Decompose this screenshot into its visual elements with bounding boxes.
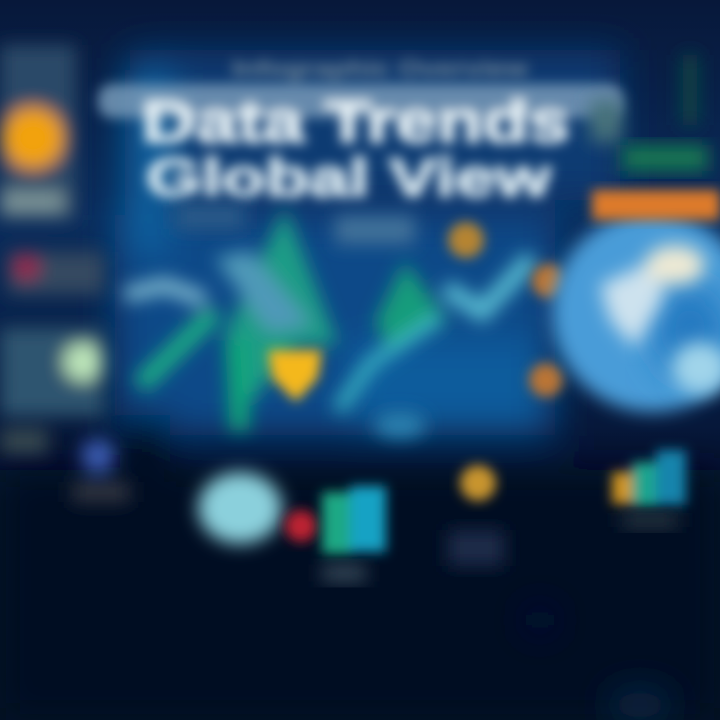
caption	[72, 482, 130, 502]
icon: orange marker	[460, 465, 496, 501]
marker	[532, 264, 566, 298]
marker	[448, 222, 484, 258]
globe banner	[592, 190, 720, 220]
green stem	[235, 340, 240, 430]
icon: teal squares	[322, 486, 386, 554]
icon: red dot	[285, 510, 317, 542]
line chart	[125, 208, 532, 438]
icon: red dot	[13, 254, 39, 280]
icon: yellow pin	[268, 350, 322, 402]
title small line: Infographic Overview	[232, 56, 529, 81]
caption blur	[622, 512, 678, 528]
dark bottom accents	[524, 606, 672, 720]
green line	[140, 312, 215, 385]
globe	[552, 145, 720, 412]
caption blur	[448, 530, 504, 566]
title	[98, 56, 623, 208]
subtitle	[175, 55, 698, 244]
marker	[529, 363, 563, 397]
sidebar panel	[0, 328, 104, 416]
teal line	[338, 318, 440, 410]
title band	[98, 84, 623, 118]
left wave	[125, 285, 205, 300]
globe deep blue	[654, 284, 720, 376]
sidebar label	[0, 192, 64, 212]
sidebar row	[8, 252, 104, 294]
icon: light blue cloud	[198, 472, 282, 544]
title line two: Global View	[146, 148, 552, 208]
second green peak	[375, 262, 448, 352]
bottom icons	[198, 450, 686, 582]
right wave	[445, 258, 532, 312]
caption blur	[322, 564, 366, 582]
chart green peak	[225, 208, 338, 415]
low ripple	[374, 412, 426, 438]
chart blue ridge	[215, 250, 312, 332]
globe body	[552, 212, 720, 412]
globe continents	[600, 245, 720, 394]
sidebar foot	[0, 428, 48, 454]
icon: sun	[2, 107, 64, 169]
panel: left sidebar	[0, 45, 130, 502]
title line one: Data Trends	[142, 90, 570, 155]
icon: multicolour tile	[612, 450, 686, 506]
data markers	[448, 222, 566, 397]
banner top glow	[622, 145, 708, 171]
icon: pale green circle	[64, 343, 102, 381]
icon: blue dot	[81, 439, 115, 473]
